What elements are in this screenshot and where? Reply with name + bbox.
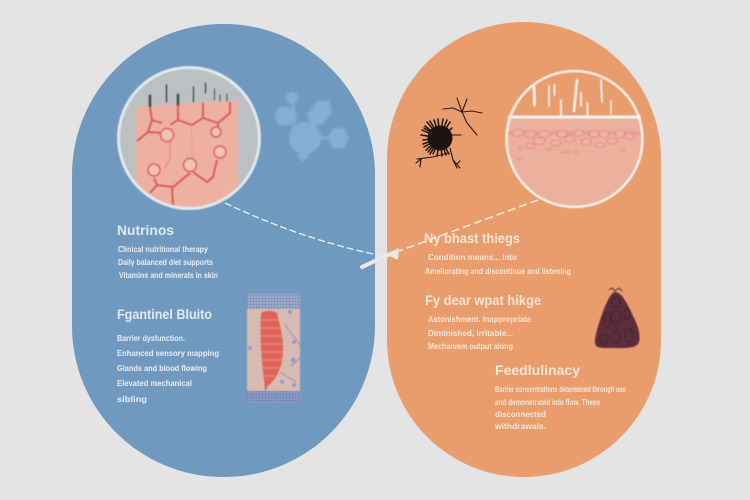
text block: blue second section: Elevated mechanical	[117, 379, 192, 388]
icon: tissue sample	[247, 294, 300, 403]
heading: Feedlulinacy: Feedlulinacy	[495, 362, 580, 378]
icon: molecule	[275, 92, 349, 162]
text block: orange first section	[425, 253, 571, 276]
text block: nutrients: Vitamins and minerals in skin	[119, 271, 218, 280]
icon: magnified tissue with vessels	[118, 68, 260, 214]
text block: orange third section: and demonstrated into flow. These	[495, 398, 600, 407]
text block: blue second section: Barrier dysfunction.	[117, 334, 185, 343]
text block: blue second section	[117, 334, 219, 404]
text block: orange second section: Mechanism output along	[428, 342, 513, 351]
panel: orange capsule	[387, 22, 661, 477]
connector: dashed line from blue circle	[225, 203, 378, 255]
text block: orange third section: withdrawals.	[494, 422, 546, 431]
text block: orange second section	[428, 315, 532, 351]
panel: blue capsule	[72, 24, 375, 477]
text block: nutrients	[118, 245, 218, 280]
text block: blue second section: sibling	[117, 395, 147, 404]
text block: blue second section: Enhanced sensory mapping	[117, 349, 219, 358]
heading: Fgantinel Bluito: Fgantinel Bluito	[117, 307, 212, 322]
text block: orange third section: Barrier concentrations determined through use	[495, 385, 626, 394]
text block: orange third section: disconnected	[495, 410, 546, 419]
icon: magnified skin layers	[505, 70, 645, 209]
icon: dark branching fibre	[443, 98, 482, 135]
arrow: central white arrow	[362, 248, 399, 267]
heading: Fy dear wpat hikge: Fy dear wpat hikge	[425, 292, 541, 308]
text block: nutrients: Daily balanced diet supports	[118, 258, 213, 267]
text block: orange first section: Condition means... into	[428, 253, 517, 262]
heading: Nutrinos: Nutrinos	[117, 223, 174, 238]
text block: orange second section: Astonishment. Inappropriate	[428, 315, 532, 324]
text block: nutrients: Clinical nutritional therapy	[118, 245, 208, 254]
text block: orange second section: Diminished, Irritable...	[428, 329, 513, 338]
text block: blue second section: Glands and blood flowing	[117, 364, 207, 373]
text block: orange third section	[494, 385, 626, 431]
icon: black spiky organism	[416, 119, 461, 168]
icon: dark brown cone	[595, 288, 640, 348]
text block: orange first section: Ameliorating and discontinue and listening	[425, 267, 571, 276]
connector: dashed line from orange circle	[399, 200, 538, 251]
heading: My blast things: Ny bhast thiegs	[424, 230, 520, 246]
